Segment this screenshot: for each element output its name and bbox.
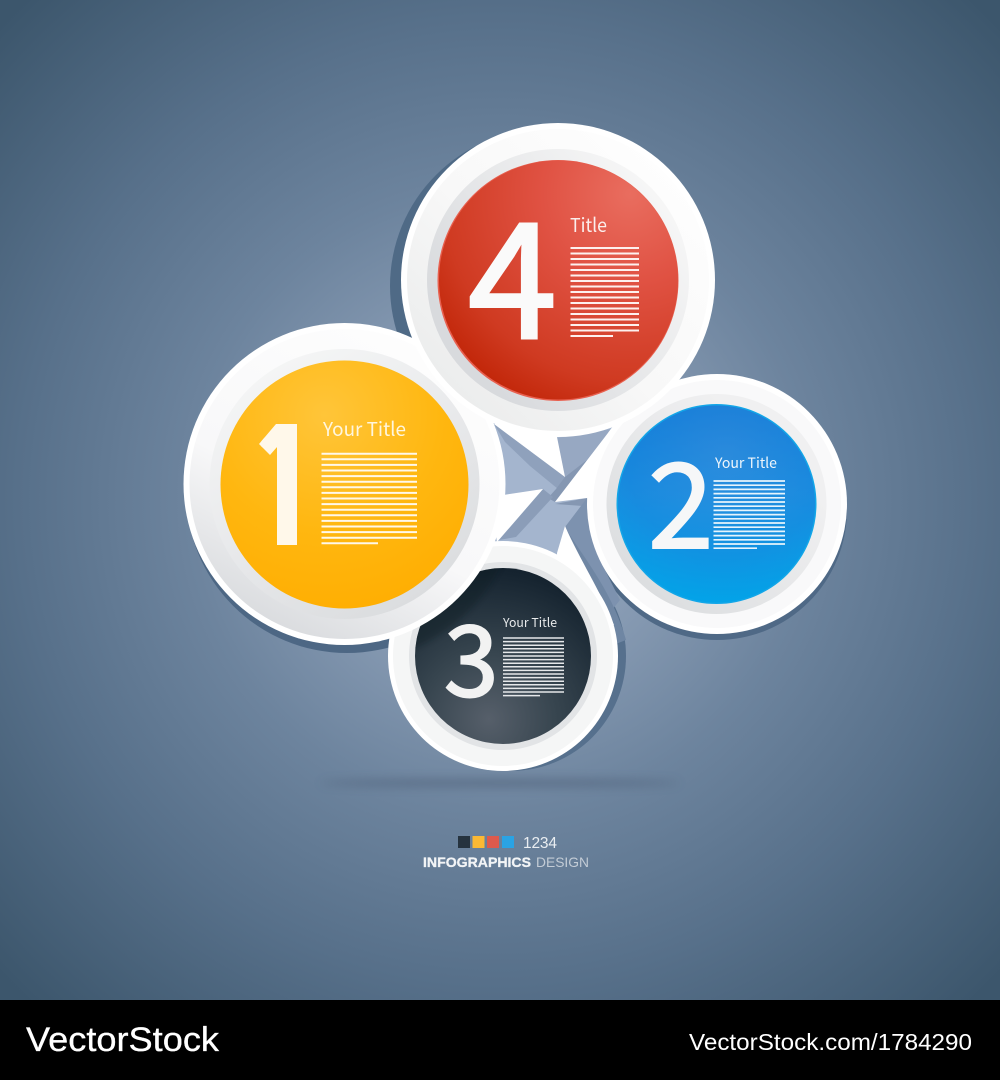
text lines 4 [570,248,639,336]
legend swatches [458,836,514,848]
title 3: Your Title [502,613,557,631]
shadow of circle 1 on circle 3 [416,568,500,648]
circle shadows [186,129,847,771]
pointer 1 [490,489,543,542]
panel: circle 1 [184,323,543,645]
yellow face 1 [220,360,468,608]
central gap between pointers [490,420,625,560]
footer logo: VectorStock [26,1021,220,1059]
title 2: Your Title [714,453,777,473]
panel: circle 2 [555,374,847,634]
floor shadow [320,779,680,787]
white disc 2 [587,374,847,634]
numeral 2: 2 [648,411,714,582]
dark face 3 [415,568,591,744]
grey ring 2 [593,380,841,628]
grey ring 4 [407,129,709,431]
panel: circle 4 [401,123,715,477]
brand text: INFOGRAPHICS [423,854,531,870]
numeral 4: 4 [468,153,557,385]
pointer 2 [555,429,640,502]
footer bar [0,1000,1000,1080]
numeral 1: 1 [242,360,330,588]
white disc 3 [388,541,618,771]
grey ring 1 [190,329,500,639]
pointer 3 [557,526,614,640]
pointer shadows [494,424,626,650]
text lines 1 [322,454,417,543]
legend [423,835,589,870]
panel: circle 3 [388,526,618,771]
white disc 1 [184,323,506,645]
brand text light: DESIGN [536,854,589,870]
red face 4 [438,160,678,401]
legend number: 1234 [523,835,557,852]
white disc 4 [401,123,715,437]
blue face 2 [616,404,816,604]
text lines 2 [714,481,785,548]
title 4: Title [570,211,607,238]
title 1: Your Title [322,415,406,442]
pointer 4 [494,400,565,477]
footer url: VectorStock.com/1784290 [689,1029,972,1055]
text lines 3 [503,638,564,696]
numeral 3: 3 [444,583,498,725]
grey ring 3 [393,546,613,766]
